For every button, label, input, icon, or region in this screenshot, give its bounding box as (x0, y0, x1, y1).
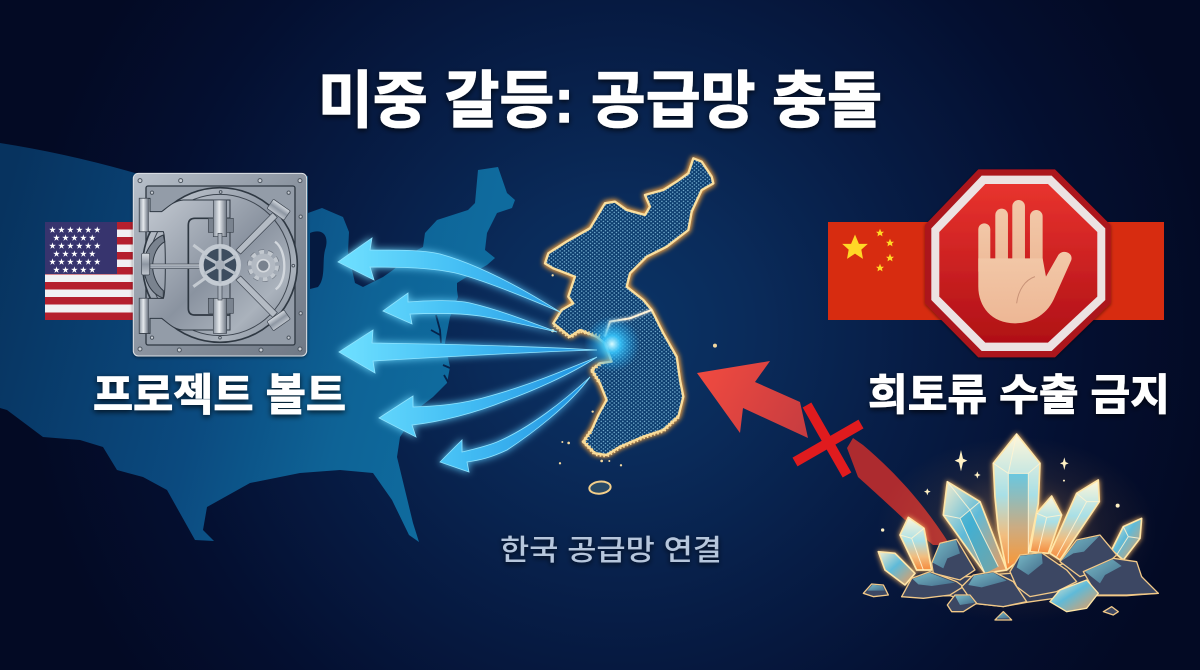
icon: China flag (828, 222, 1164, 320)
label: project vault: 프로젝트 볼트 (93, 371, 346, 420)
icon: US flag: ★ ★ ★ ★ ★ (53, 234, 96, 242)
jagged coast (553, 324, 678, 456)
rivets (138, 179, 302, 352)
glow: Seoul hub (584, 316, 640, 372)
crystal shards (878, 434, 1142, 585)
arrow: rare earth flow blocked (697, 361, 950, 545)
icon: US flag: ★ ★ ★ ★ ★ ★ (49, 242, 101, 250)
rock highlights (867, 536, 1122, 618)
icon: rare earth crystals (863, 434, 1158, 623)
icon: US flag: ★ ★ ★ ★ ★ (53, 266, 96, 274)
door circle (143, 188, 297, 342)
arrow 2 (383, 293, 557, 332)
rods (142, 199, 290, 333)
arrow 3 (339, 330, 597, 373)
recess (188, 218, 230, 315)
icon: US flag (45, 222, 133, 320)
cross mark (795, 405, 861, 475)
arrow 4 (379, 357, 597, 437)
handwheel (201, 246, 239, 284)
left curved bar (144, 235, 165, 298)
rocks (863, 535, 1158, 620)
gear (249, 252, 277, 280)
map: Korean peninsula (545, 158, 717, 495)
caption: Korea supply chain link: 한국 공급망 연결 (500, 534, 722, 567)
glassy rock (1050, 580, 1098, 612)
plate (133, 173, 307, 356)
door body with hinges (139, 198, 230, 333)
title: 미중 갈등: 공급망 충돌 (318, 67, 882, 136)
icon: stop sign with hand (925, 169, 1111, 357)
arrows: supply chain links to US (338, 238, 597, 472)
hand (978, 200, 1072, 323)
icon: US flag: ★ ★ ★ ★ ★ (53, 250, 96, 258)
sparkles (881, 450, 1120, 532)
arrow 1 (338, 238, 560, 312)
icon: US flag: ★ ★ ★ ★ ★ ★ (49, 258, 101, 266)
icon: vault door (133, 173, 307, 356)
rock base (902, 563, 1158, 607)
icon: US flag: ★ ★ ★ ★ ★ ★ (49, 226, 101, 234)
crystal facets (1008, 473, 1028, 563)
map: United States (0, 143, 515, 542)
arrow 5 (440, 377, 590, 472)
label: rare earth export ban: 희토류 수출 금지 (868, 372, 1170, 420)
